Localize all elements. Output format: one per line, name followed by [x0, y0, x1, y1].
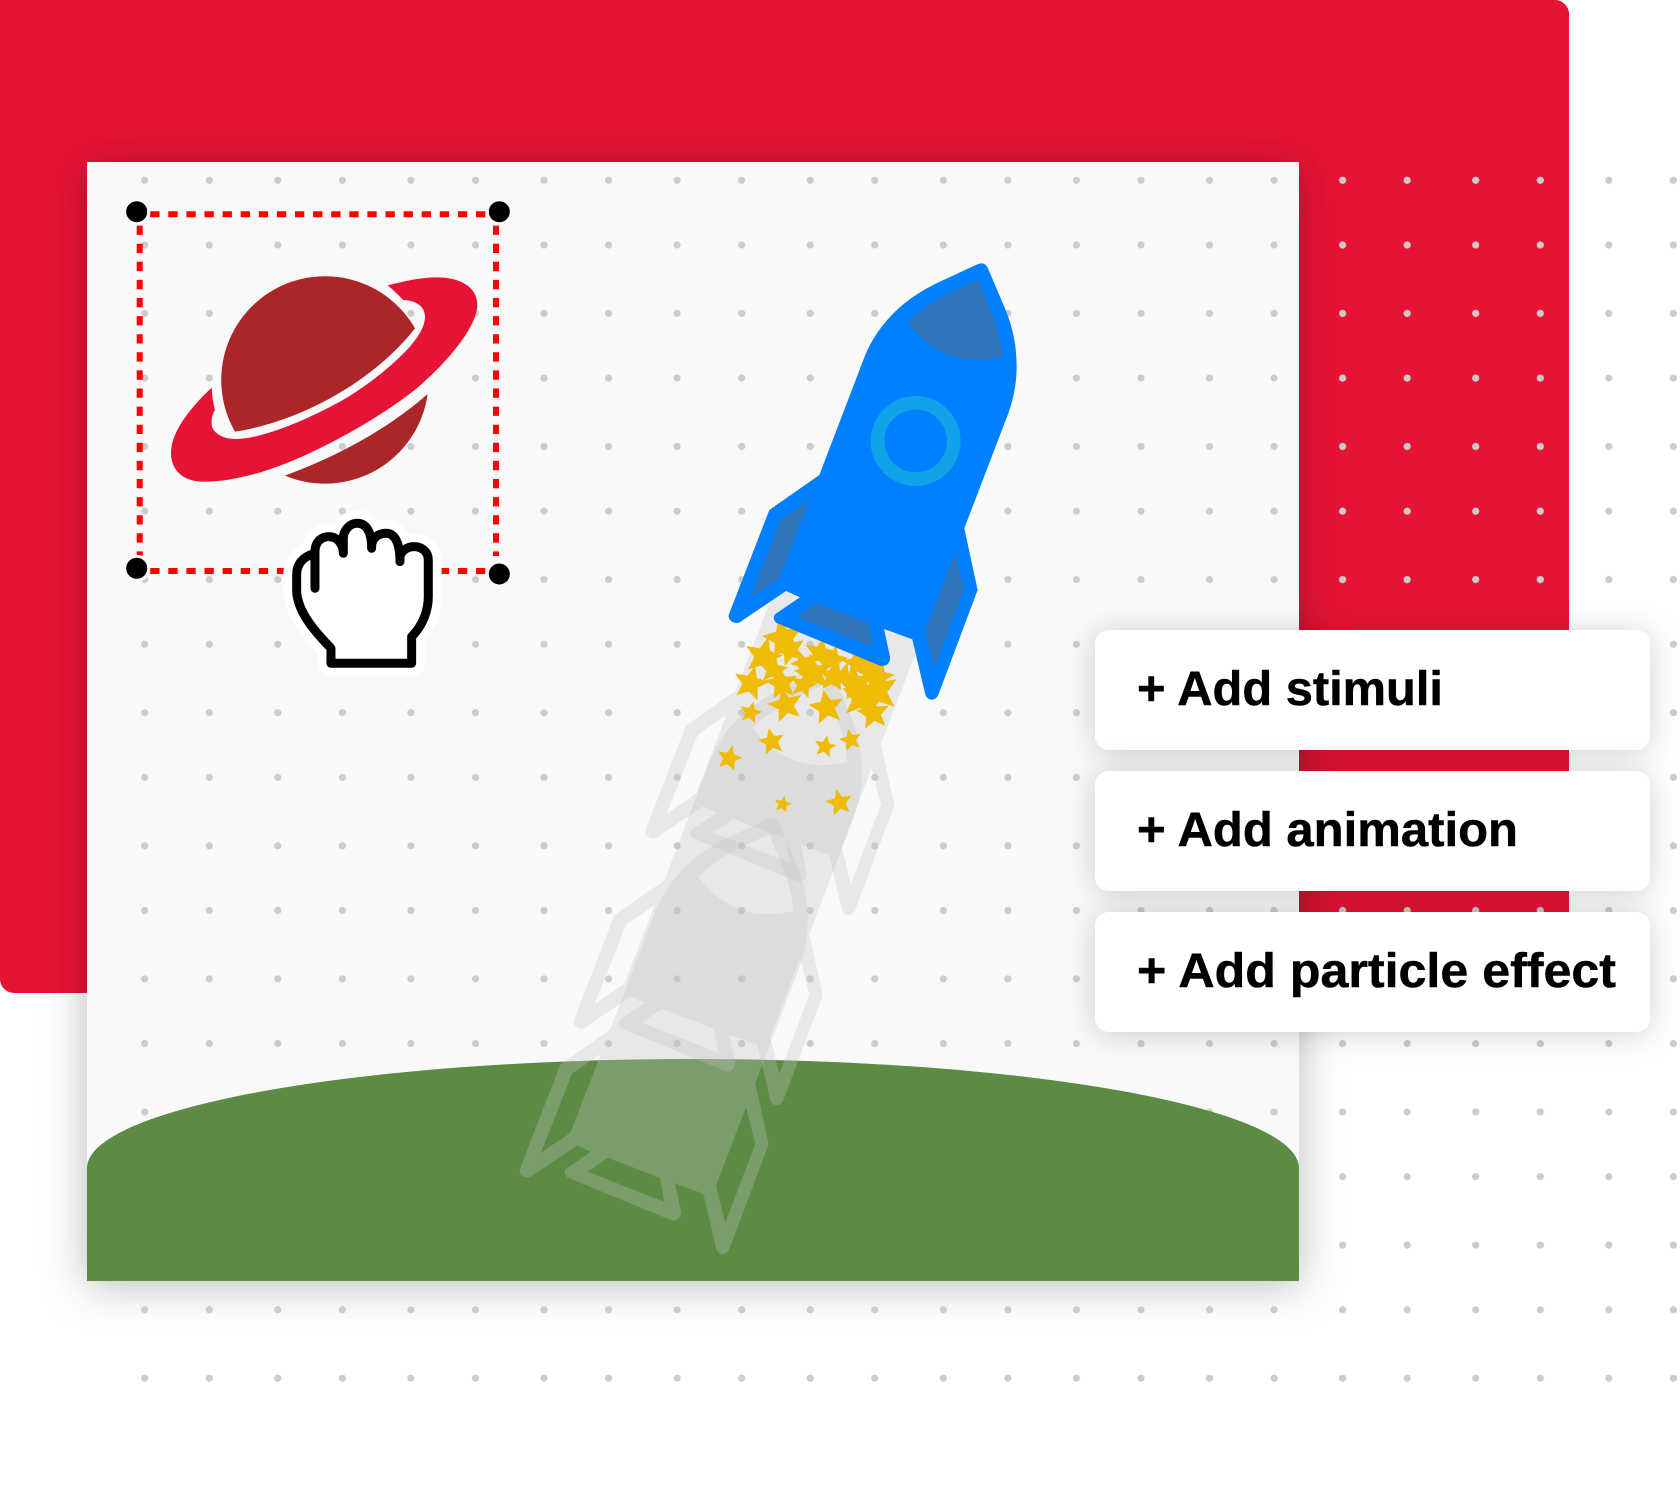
card: add particle effect: + Add particle effect	[1137, 945, 1616, 998]
icon: grabbing hand cursor	[297, 523, 428, 663]
dot grid	[141, 176, 1680, 1385]
card: add animation: + Add animation	[1137, 804, 1518, 857]
red backdrop panel	[0, 0, 1569, 993]
main blue rocket	[729, 263, 1017, 700]
planet upper half	[221, 276, 415, 432]
ghost rocket upper	[645, 479, 933, 915]
card: add particle effect	[1095, 912, 1650, 1032]
planet lower half	[285, 394, 428, 484]
green ground	[87, 1059, 1299, 1281]
rocket nose cone	[907, 280, 1002, 360]
rocket body	[729, 263, 1017, 700]
canvas panel	[87, 162, 1299, 1281]
selection handles	[125, 200, 511, 586]
porthole window	[877, 403, 954, 479]
dashed selection box	[140, 214, 496, 571]
card: add stimuli: + Add stimuli	[1137, 663, 1443, 716]
card: add animation	[1095, 771, 1650, 891]
particle stars	[714, 613, 903, 816]
planet with ring	[171, 276, 477, 484]
right fin	[925, 553, 964, 668]
card: add stimuli	[1095, 630, 1650, 750]
ghost rocket lower	[520, 818, 808, 1254]
left fin	[750, 499, 810, 598]
rocket motion trail	[520, 479, 933, 1254]
planet ring	[171, 277, 477, 482]
nozzle	[797, 603, 873, 647]
ghost rocket middle	[574, 669, 862, 1105]
